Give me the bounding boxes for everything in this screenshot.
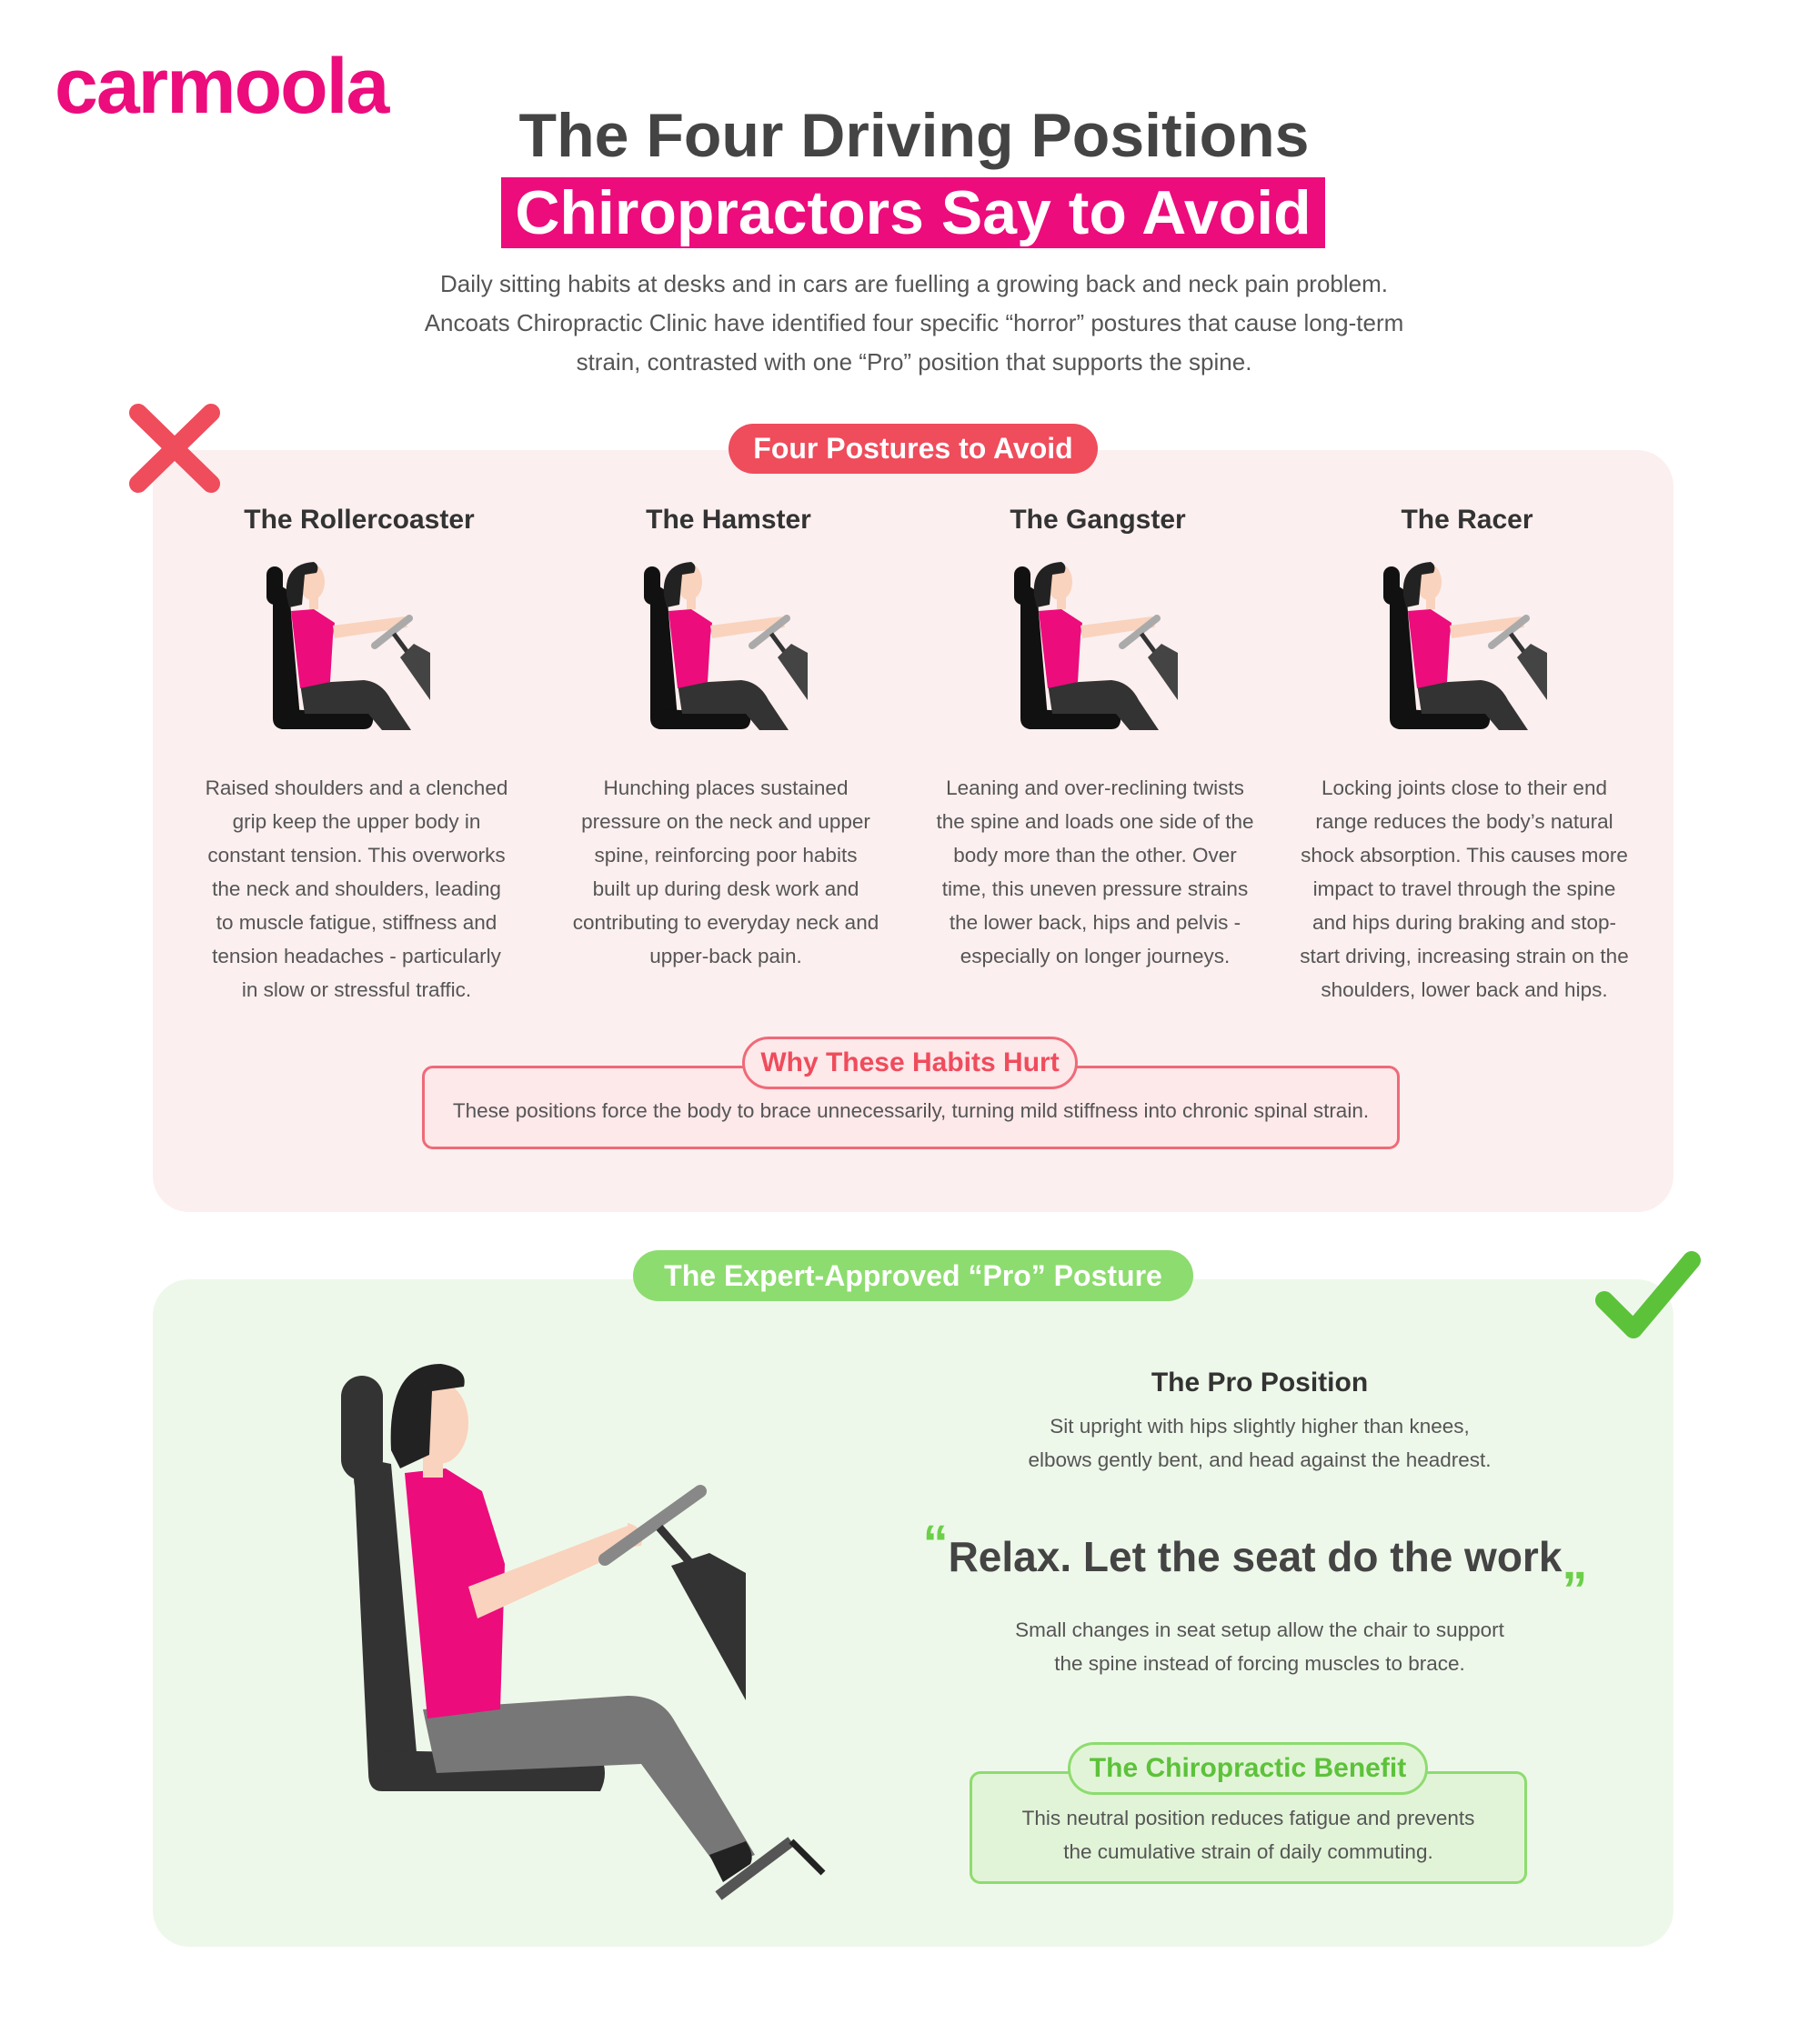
text: rollercoaster: in slow or stressful traffic. — [242, 978, 471, 1001]
text: racer: Locking joints close to their end — [1322, 777, 1607, 799]
callout: chiropractic benefit: This neutral position reduces fatigue and prevents — [1022, 1807, 1474, 1829]
text: racer — [1300, 777, 1629, 1001]
text: hamster: built up during desk work and — [593, 877, 859, 900]
text: gangster — [936, 777, 1253, 967]
panel: pro posture — [153, 1279, 1673, 1947]
pill: why these habits hurt: Why These Habits Hurt — [760, 1047, 1060, 1077]
text: gangster: time, this uneven pressure strains — [942, 877, 1248, 900]
intro paragraph — [424, 270, 1403, 376]
text: gangster: the lower back, hips and pelvis - — [950, 911, 1241, 934]
text: pro position — [1028, 1415, 1492, 1471]
callout: chiropractic benefit — [970, 1771, 1527, 1884]
text: small changes: the spine instead of forcing muscles to brace. — [1054, 1652, 1465, 1675]
intro paragraph: Daily sitting habits at desks and in cars are fuelling a growing back and neck pain problem. — [440, 270, 1388, 297]
callout: chiropractic benefit: the cumulative strain of daily commuting. — [1063, 1840, 1433, 1863]
text: racer: and hips during braking and stop- — [1312, 911, 1616, 934]
heading: Rollercoaster: The Rollercoaster — [244, 505, 475, 535]
text: pro position: Sit upright with hips slightly higher than knees, — [1050, 1415, 1470, 1438]
pill: chiropractic benefit — [1068, 1742, 1428, 1795]
text: racer: shoulders, lower back and hips. — [1321, 978, 1608, 1001]
intro paragraph: strain, contrasted with one “Pro” position that supports the spine. — [577, 348, 1251, 376]
heading: Gangster: The Gangster — [1010, 505, 1186, 535]
figure: gangster — [1014, 562, 1178, 730]
text: rollercoaster: the neck and shoulders, leading — [212, 877, 501, 900]
text: rollercoaster — [206, 777, 508, 1001]
icon: check mark — [1595, 1251, 1701, 1338]
text: racer: range reduces the body’s natural — [1315, 810, 1613, 833]
text: gangster: especially on longer journeys. — [960, 945, 1230, 967]
text: racer: start driving, increasing strain on the — [1300, 945, 1629, 967]
text: rollercoaster: Raised shoulders and a clenched — [206, 777, 508, 799]
pill: pro posture: The Expert-Approved “Pro” Posture — [664, 1259, 1162, 1292]
pill: Four Postures to Avoid — [729, 424, 1098, 474]
figure: hamster — [644, 562, 808, 730]
intro paragraph: Ancoats Chiropractic Clinic have identified four specific “horror” postures that cause long-term — [425, 309, 1403, 336]
text: rollercoaster: constant tension. This overworks — [207, 844, 506, 867]
illustrations: four drivers — [266, 562, 1547, 730]
callout: why these habits hurt: These positions force the body to brace unnecessarily, turning mild stiffness into chronic spinal strain. — [453, 1099, 1369, 1122]
icon: red X — [129, 404, 220, 493]
text: hamster: Hunching places sustained — [604, 777, 848, 799]
title highlight: Chiropractors Say to Avoid — [515, 178, 1311, 247]
text: hamster: pressure on the neck and upper — [581, 810, 870, 833]
panel: postures to avoid — [153, 450, 1673, 1212]
pill: Four Postures to Avoid: Four Postures to Avoid — [753, 432, 1073, 465]
figure: racer — [1383, 562, 1547, 730]
text: rollercoaster: grip keep the upper body in — [233, 810, 480, 833]
logo: carmoola — [55, 43, 387, 130]
heading: pro position: The Pro Position — [1151, 1368, 1368, 1398]
text: rollercoaster: to muscle fatigue, stiffness and — [216, 911, 497, 934]
text: gangster: body more than the other. Over — [953, 844, 1237, 867]
text: gangster: the spine and loads one side of the — [936, 810, 1253, 833]
text: hamster: contributing to everyday neck and — [573, 911, 879, 934]
pill: pro posture — [633, 1250, 1193, 1301]
text: rollercoaster: tension headaches - particularly — [212, 945, 501, 967]
title: The Four Driving Positions — [519, 101, 1309, 170]
text: small changes: Small changes in seat setup allow the chair to support — [1015, 1618, 1504, 1641]
quote: “Relax. Let the seat do the work„ — [923, 1514, 1587, 1589]
heading: Hamster: The Hamster — [646, 505, 811, 535]
text: small changes — [1015, 1618, 1504, 1675]
heading: Racer: The Racer — [1401, 505, 1533, 535]
pill: why these habits hurt — [742, 1037, 1078, 1089]
text: hamster — [573, 777, 879, 967]
text: racer: shock absorption. This causes more — [1301, 844, 1628, 867]
figure: rollercoaster — [266, 562, 430, 730]
callout: why these habits hurt — [422, 1066, 1400, 1149]
text: gangster: Leaning and over-reclining twists — [946, 777, 1244, 799]
pill: chiropractic benefit: The Chiropractic Benefit — [1090, 1753, 1406, 1783]
text: pro position: elbows gently bent, and head against the headrest. — [1028, 1448, 1492, 1471]
figure: pro driver — [341, 1364, 826, 1900]
text: racer: impact to travel through the spine — [1313, 877, 1615, 900]
text: hamster: spine, reinforcing poor habits — [595, 844, 857, 867]
text: hamster: upper-back pain. — [649, 945, 802, 967]
